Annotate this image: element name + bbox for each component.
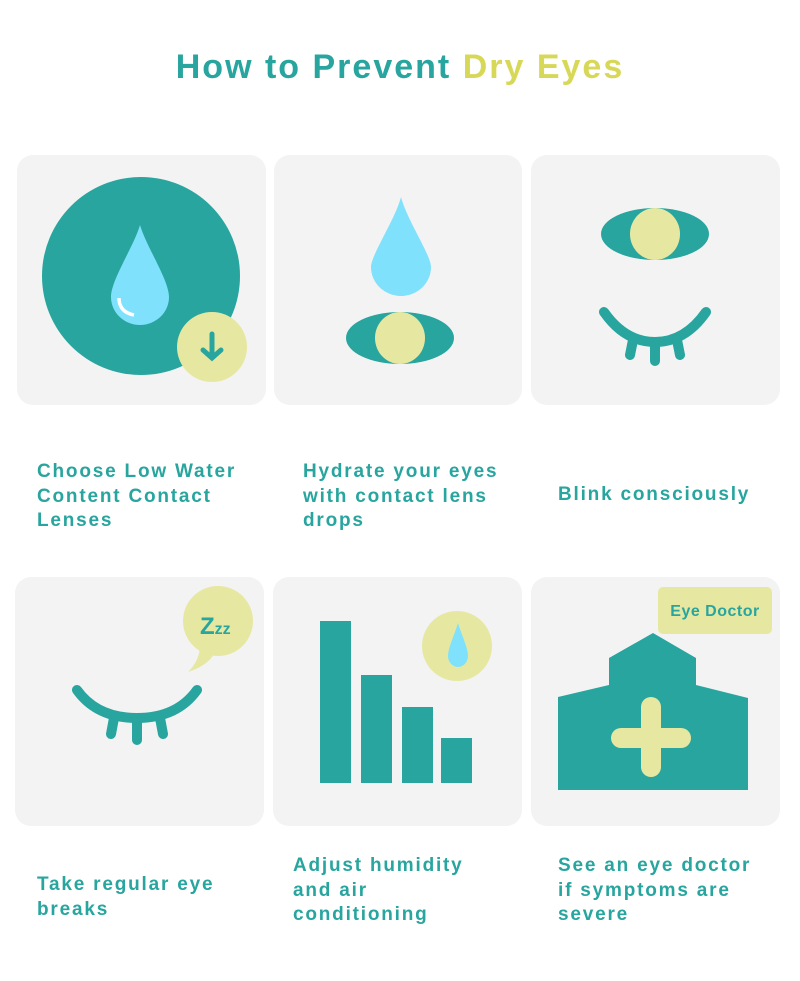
caption 6 [558, 855, 751, 925]
panel: humidity [273, 577, 522, 826]
caption 2: with contact lens [303, 486, 488, 506]
panel: hydrate [274, 155, 522, 405]
caption 6: severe [558, 904, 629, 925]
title: How to Prevent Dry Eyes [176, 48, 624, 86]
caption 5: Adjust humidity [293, 855, 464, 876]
caption 6: See an eye doctor [558, 855, 751, 876]
caption 1: Choose Low Water [37, 461, 236, 482]
caption 5: conditioning [293, 904, 429, 925]
icon: drop badge [422, 611, 492, 681]
caption 1: Content Contact [37, 486, 212, 506]
icon: speech bubble zzz [183, 586, 253, 672]
icon: down arrow badge [177, 312, 247, 382]
panel: blink [531, 155, 780, 405]
icon: closed eye [604, 312, 706, 361]
caption 6: if symptoms are [558, 880, 731, 900]
label: eye doctor: Eye Doctor [670, 603, 760, 620]
panel: eye doctor [531, 577, 780, 826]
caption 4: breaks [37, 898, 109, 920]
caption 2: Hydrate your eyes [303, 461, 498, 482]
caption 2: drops [303, 510, 365, 531]
caption 3: Blink consciously [558, 484, 750, 505]
icon: eye [346, 312, 454, 364]
icon: circle with drop [42, 177, 240, 375]
icon: speech bubble zzz: Zzz [200, 613, 231, 640]
icon: drop [371, 197, 431, 296]
bar chart [320, 621, 472, 783]
caption 2 [303, 461, 498, 531]
caption 4: Take regular eye [37, 874, 214, 895]
caption 4 [37, 874, 214, 920]
icon: hospital [558, 633, 748, 790]
caption 5 [293, 855, 464, 925]
caption 1 [37, 461, 236, 531]
panel: eye breaks [15, 577, 264, 826]
icon: open eye [601, 208, 709, 260]
label: eye doctor [658, 587, 772, 634]
icon: closed eye [77, 690, 197, 740]
caption 5: and air [293, 880, 368, 900]
caption 1: Lenses [37, 510, 113, 531]
panel: low water lenses [17, 155, 266, 405]
